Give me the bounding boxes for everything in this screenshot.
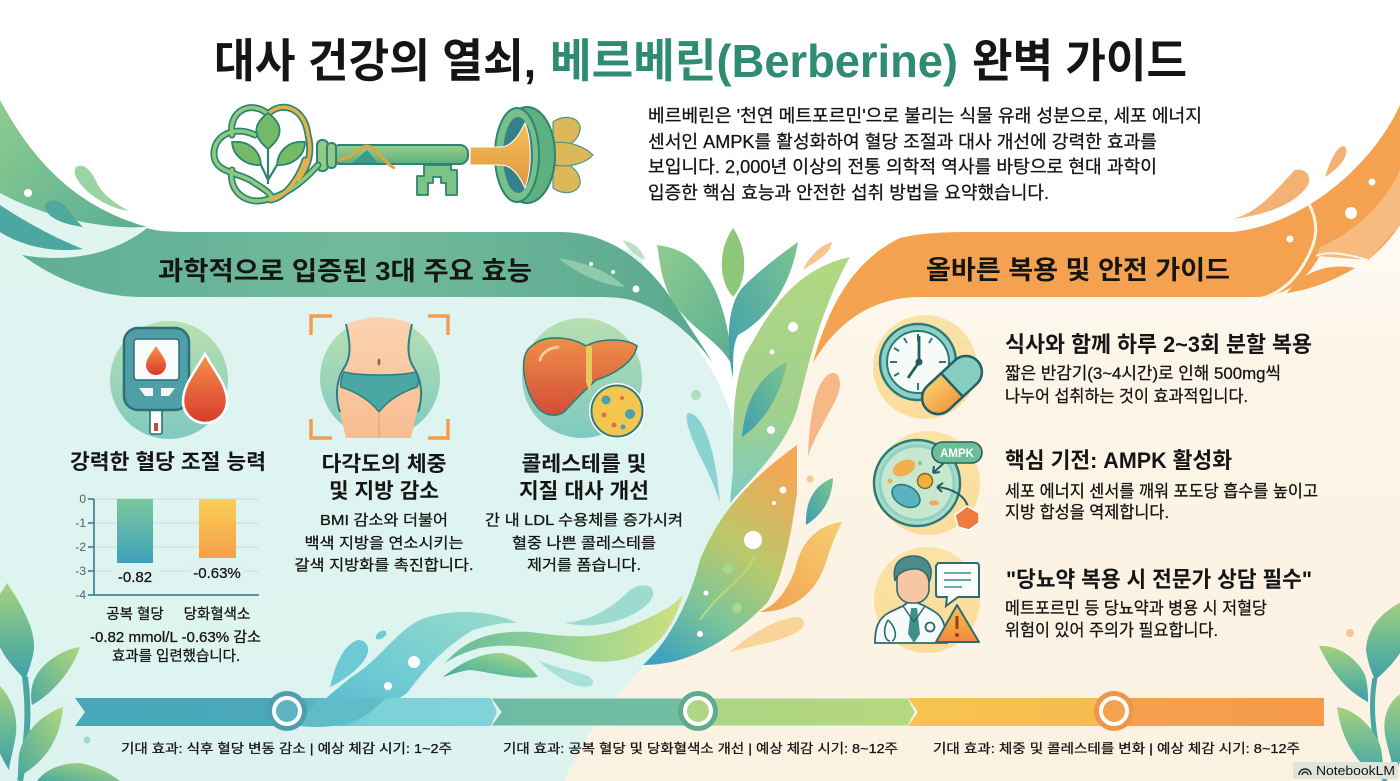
icon: botanical key — [214, 107, 593, 203]
watermark badge: NotebookLM — [1316, 763, 1395, 778]
bar chart: glucose and HbA1c reduction: 0 — [79, 492, 86, 506]
key shaft — [332, 145, 468, 164]
corner plant: right — [1319, 600, 1400, 781]
panel: benefit 3 cholesterol — [485, 318, 683, 574]
body: weight and fat: 갈색 지방화를 촉진합니다. — [294, 557, 474, 574]
right banner heading: 올바른 복용 및 안전 가이드 — [926, 255, 1230, 285]
body: cholesterol: 간 내 LDL 수용체를 증가시켜 — [485, 512, 683, 529]
icon: clock and capsule — [873, 315, 989, 421]
bar chart: glucose and HbA1c reduction: -3 — [75, 564, 86, 578]
key bit — [417, 165, 457, 195]
heading: dosing: 식사와 함께 하루 2~3회 분할 복용 — [1005, 332, 1312, 357]
bar chart: glucose and HbA1c reduction: -0.63% — [193, 565, 241, 582]
background: mint left panel — [0, 190, 737, 781]
heading: cholesterol — [519, 453, 649, 503]
key centre leaves — [232, 113, 305, 165]
key ring — [499, 107, 555, 203]
timeline segment 3 — [908, 691, 1324, 731]
chart caption: 공복 혈당 — [106, 606, 164, 623]
heading: cholesterol: 콜레스테를 및 — [522, 453, 646, 476]
intro text block: 베르베린은 '천연 메트포르민'으로 불리는 식물 유래 성분으로, 세포 에너지 — [648, 106, 1202, 126]
heading: weight and fat: 다각도의 체중 — [322, 453, 446, 476]
heading: weight and fat — [322, 453, 446, 503]
timeline caption 3: 기대 효과: 체중 및 콜레스테를 변화 | 예상 체감 시기: 8~12주 — [933, 741, 1300, 756]
timeline arrow — [75, 691, 1324, 731]
panel: dosing guide item — [873, 315, 1312, 421]
icon: doctor with speech bubble and warning — [874, 547, 980, 653]
timeline segment 2 — [491, 691, 915, 731]
right section banner — [813, 105, 1400, 363]
key gold shaft — [470, 123, 530, 188]
body: safety: 메트포르민 등 당뇨약과 병용 시 저혈당 — [1005, 599, 1267, 618]
bar chart: glucose and HbA1c reduction: -4 — [75, 588, 86, 602]
top-left swoosh — [0, 100, 147, 250]
bar chart: glucose and HbA1c reduction: -1 — [75, 516, 86, 530]
body: weight and fat: 백색 지방을 연소시키는 — [304, 535, 464, 552]
icon: waist with focus brackets — [311, 316, 448, 438]
icon: liver and fat cell — [522, 318, 645, 439]
corner plant: left — [0, 583, 120, 781]
panel: benefit 2 weight and fat — [294, 316, 474, 574]
body: cholesterol: 제거를 폼습니다. — [527, 557, 641, 574]
background: cream right panel — [564, 220, 1400, 781]
icon: cell with AMPK label: AMPK — [940, 448, 975, 460]
bottom wave decoration — [300, 585, 683, 727]
intro text block — [648, 106, 1202, 203]
title: 완벽 가이드 — [972, 35, 1187, 87]
left section banner — [22, 228, 713, 363]
body: dosing: 짧은 반감기(3~4시간)로 인해 500mg씩 — [1005, 364, 1281, 383]
body: mechanism: 세포 에너지 센서를 깨워 포도당 흡수를 높이고 — [1005, 482, 1318, 501]
body: dosing — [1005, 364, 1281, 406]
key ring flower petals — [553, 117, 593, 193]
body: mechanism — [1005, 482, 1318, 522]
bar chart: glucose and HbA1c reduction — [75, 492, 259, 602]
bar chart: glucose and HbA1c reduction: -2 — [75, 540, 86, 554]
key collar — [317, 140, 328, 171]
intro text block: 센서인 AMPK를 활성화하여 혈당 조절과 대사 개선에 강력한 효과를 — [648, 132, 1157, 152]
body: dosing: 나누어 섭취하는 것이 효과적입니다. — [1005, 387, 1248, 406]
bar chart: glucose and HbA1c reduction: -0.82 — [118, 569, 152, 586]
icon: cell with AMPK label — [874, 431, 982, 535]
chart caption: -0.82 mmol/L -0.63% 감소 — [90, 629, 261, 646]
heading: safety: "당뇨약 복용 시 전문가 상담 필수" — [1006, 567, 1312, 592]
chart caption: 당화혈색소 — [184, 606, 250, 623]
panel: mechanism guide item — [874, 431, 1318, 535]
body: cholesterol: 혈중 나쁜 콜레스테를 — [512, 535, 656, 552]
body: safety — [1005, 599, 1267, 640]
body: weight and fat: BMI 감소와 더불어 — [320, 512, 448, 529]
focus brackets — [311, 316, 448, 438]
left banner heading: 과학적으로 입증된 3대 주요 효능 — [158, 256, 532, 286]
key bow vines — [214, 107, 318, 201]
chart caption — [90, 606, 261, 665]
heading: mechanism: 핵심 기전: AMPK 활성화 — [1005, 448, 1232, 473]
body: cholesterol — [485, 512, 683, 574]
chart caption: 효과를 입련했습니다. — [112, 648, 240, 665]
body: weight and fat — [294, 512, 474, 574]
title — [214, 35, 1187, 87]
heading: blood sugar: 강력한 혈당 조절 능력 — [70, 451, 266, 474]
intro text block: 입증한 핵심 효능과 안전한 섭취 방법을 요약했습니다. — [648, 183, 1049, 203]
body: mechanism: 지방 합성을 역제합니다. — [1005, 503, 1169, 522]
timeline segment 1 — [75, 691, 497, 731]
timeline caption 2: 기대 효과: 공복 혈당 및 당화혈색소 개선 | 예상 체감 시기: 8~12주 — [503, 741, 898, 756]
timeline caption 1: 기대 효과: 식후 혈당 변동 감소 | 예상 체감 시기: 1~2주 — [121, 741, 452, 756]
watermark badge — [1293, 762, 1398, 779]
heading: cholesterol: 지질 대사 개선 — [519, 480, 649, 503]
heading: weight and fat: 및 지방 감소 — [329, 480, 439, 503]
centre botanical decoration — [623, 228, 850, 665]
title: 대사 건강의 열쇠, — [214, 35, 536, 87]
panel: safety guide item — [874, 547, 1312, 653]
panel: benefit 1 blood sugar — [70, 321, 266, 665]
icon: glucose meter with blood drop — [110, 321, 228, 439]
title: 베르베린(Berberine) — [550, 35, 958, 87]
body: safety: 위험이 있어 주의가 필요합니다. — [1005, 621, 1218, 640]
intro text block: 보입니다. 2,000년 이상의 전통 의학적 역사를 바탕으로 현대 과학이 — [648, 157, 1157, 177]
